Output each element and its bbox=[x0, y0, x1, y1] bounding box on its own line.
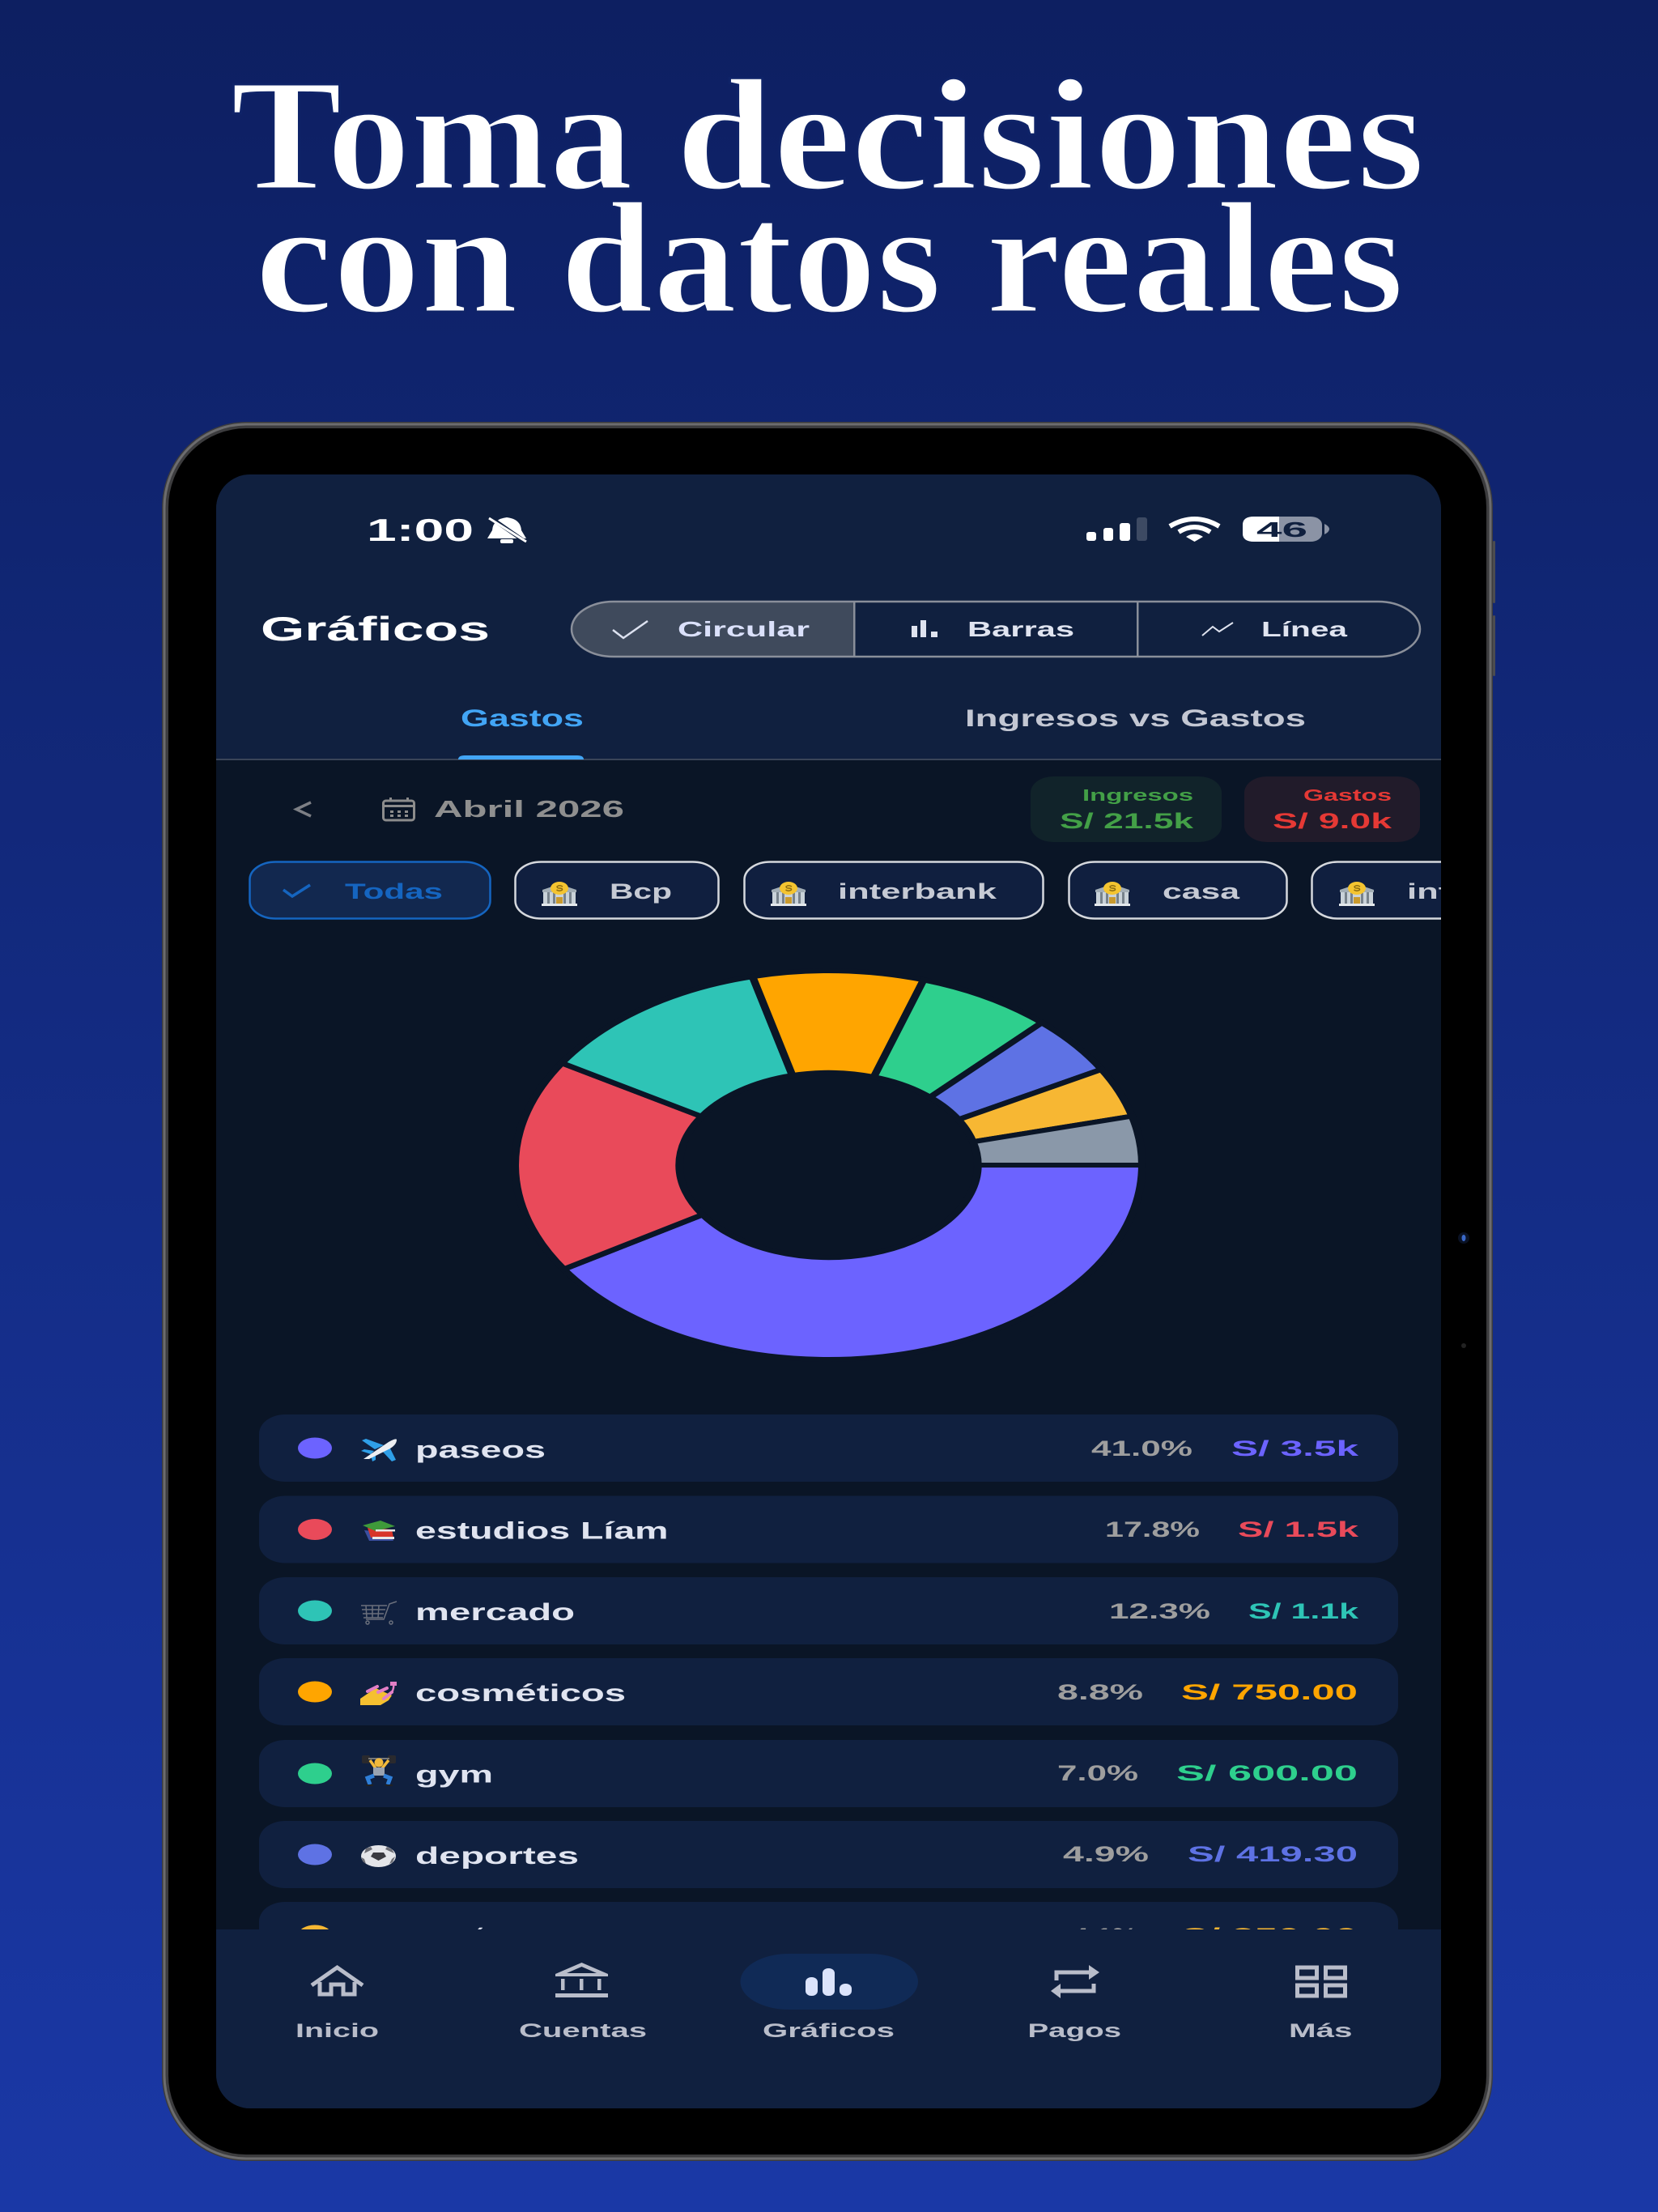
header panel bbox=[216, 474, 1441, 759]
legend row: estudios Líam: estudios Líam bbox=[415, 1517, 669, 1545]
nav item: Más bbox=[1289, 1967, 1352, 2042]
segment: Línea: Línea bbox=[1261, 617, 1348, 641]
legend row: cosméticos: 8.8% bbox=[1057, 1680, 1143, 1704]
filter chip: Bcp: Bcp bbox=[610, 879, 672, 904]
icon: nail polish bbox=[360, 1682, 397, 1705]
icon: airplane bbox=[361, 1439, 397, 1461]
nav item: Pagos bbox=[1028, 1965, 1121, 2042]
legend row: mercado: S/ 1.1k bbox=[1248, 1599, 1360, 1623]
slice: deportes bbox=[930, 1023, 1102, 1120]
icon: shopping cart bbox=[361, 1602, 397, 1624]
filter chip: interbank bbox=[745, 861, 1043, 918]
legend row: mercado: 12.3% bbox=[1109, 1599, 1210, 1623]
legend row: gym: gym bbox=[415, 1762, 493, 1788]
legend row: cosméticos: S/ 750.00 bbox=[1181, 1680, 1358, 1704]
title: con bbox=[255, 169, 518, 347]
legend row: gym bbox=[259, 1740, 1398, 1807]
legend row: paseos: S/ 3.5k bbox=[1231, 1436, 1360, 1461]
nav item: Inicio: Inicio bbox=[295, 2020, 379, 2042]
summary pill: Gastos: S/ 9.0k bbox=[1273, 809, 1393, 833]
legend row: partially hidden: mamá bbox=[415, 1924, 486, 1951]
icon: back chevron bbox=[296, 802, 311, 816]
slice: estudios Líam bbox=[515, 1063, 703, 1270]
segment: Circular: Circular bbox=[678, 617, 810, 641]
title bbox=[231, 46, 1425, 347]
tab: Gastos bbox=[458, 705, 584, 759]
tab: Gastos: Gastos bbox=[461, 705, 584, 732]
legend row: cosméticos: cosméticos bbox=[415, 1680, 626, 1707]
icon: signal bbox=[1086, 517, 1147, 541]
nav item: Gráficos (active): Gráficos bbox=[763, 2020, 895, 2042]
icon: books bbox=[363, 1521, 395, 1541]
legend row: deportes: S/ 419.30 bbox=[1188, 1842, 1358, 1866]
legend row: mercado: mercado bbox=[415, 1599, 575, 1626]
slice: paseos bbox=[564, 1165, 1142, 1359]
icon: muted bell bbox=[487, 517, 526, 543]
legend row: partially hidden: S/ 350.00 bbox=[1181, 1924, 1358, 1948]
heading: Gráficos: Gráficos bbox=[261, 610, 490, 648]
summary pill: Ingresos: S/ 21.5k bbox=[1060, 809, 1195, 833]
nav item: Más: Más bbox=[1289, 2020, 1352, 2042]
summary pill: Gastos: Gastos bbox=[1303, 787, 1392, 805]
nav item: Gráficos (active) bbox=[740, 1954, 918, 2042]
title: Toma bbox=[231, 46, 633, 223]
legend row: partially hidden: 4.1% bbox=[1073, 1924, 1137, 1948]
filter chip: casa bbox=[1069, 861, 1287, 918]
month label: Abril 2026 bbox=[434, 797, 624, 823]
segment: Barras bbox=[912, 620, 1073, 637]
legend row: deportes: 4.9% bbox=[1063, 1842, 1149, 1866]
legend row: gym: S/ 600.00 bbox=[1176, 1761, 1358, 1785]
filter chip: Todas: Todas bbox=[345, 879, 443, 904]
legend row: deportes: deportes bbox=[415, 1843, 579, 1870]
filter chip: casa: casa bbox=[1163, 879, 1241, 904]
legend row: paseos: paseos bbox=[415, 1436, 546, 1464]
tab: Ingresos vs Gastos: Ingresos vs Gastos bbox=[965, 705, 1306, 732]
legend row: deportes bbox=[259, 1821, 1398, 1888]
legend row: estudios Líam: 17.8% bbox=[1105, 1517, 1200, 1542]
icon: weightlifter bbox=[362, 1755, 396, 1786]
filter chip: interbank (clipped) bbox=[1311, 861, 1441, 920]
legend row: gym: 7.0% bbox=[1057, 1761, 1138, 1785]
segment: Barras: Barras bbox=[967, 617, 1074, 641]
bottom navigation bar bbox=[216, 1929, 1441, 2108]
status bar time: 1:00 bbox=[367, 513, 474, 548]
title: decisiones bbox=[676, 46, 1425, 223]
icon: battery: 46 bbox=[1256, 517, 1307, 542]
summary pill: Ingresos bbox=[1031, 776, 1222, 842]
nav item: Inicio bbox=[295, 1967, 379, 2042]
summary pill: Ingresos: Ingresos bbox=[1082, 787, 1193, 805]
slice: cosméticos bbox=[753, 971, 924, 1077]
slice: gym bbox=[874, 980, 1042, 1097]
segment: Línea bbox=[1201, 621, 1347, 636]
legend row: estudios Líam: S/ 1.5k bbox=[1238, 1517, 1360, 1542]
nav item: Cuentas: Cuentas bbox=[519, 2020, 647, 2042]
filter chip: Bcp bbox=[515, 861, 719, 918]
segment: Circular bbox=[612, 620, 810, 640]
icon: soccer ball bbox=[361, 1845, 396, 1867]
icon: wifi bbox=[1170, 519, 1219, 542]
legend row: estudios Líam bbox=[259, 1496, 1398, 1563]
slice: mercado bbox=[562, 976, 793, 1117]
legend row: paseos: 41.0% bbox=[1091, 1436, 1192, 1461]
title: reales bbox=[986, 169, 1404, 347]
legend row: partially hidden bbox=[259, 1902, 1398, 1969]
icon: battery bbox=[1243, 517, 1329, 542]
legend row: paseos bbox=[259, 1414, 1398, 1482]
app screen bbox=[216, 474, 1441, 2108]
segmented control bbox=[572, 602, 1420, 657]
filter chip: interbank: interbank bbox=[838, 879, 998, 904]
icon: calendar bbox=[383, 798, 414, 820]
filter chip: Todas bbox=[249, 861, 491, 918]
summary pill: Gastos bbox=[1244, 776, 1420, 842]
slice: yellow category bbox=[959, 1070, 1132, 1142]
legend row: mercado bbox=[259, 1577, 1398, 1644]
donut chart bbox=[515, 971, 1142, 1359]
filter chip: interbank (clipped): interbank bbox=[1407, 879, 1567, 904]
slice: gray category bbox=[973, 1116, 1142, 1165]
legend row: cosméticos bbox=[259, 1658, 1398, 1725]
tablet device frame bbox=[164, 424, 1495, 2159]
nav item: Cuentas bbox=[519, 1963, 647, 2042]
nav item: Pagos: Pagos bbox=[1028, 2020, 1121, 2042]
title: datos bbox=[560, 169, 942, 347]
